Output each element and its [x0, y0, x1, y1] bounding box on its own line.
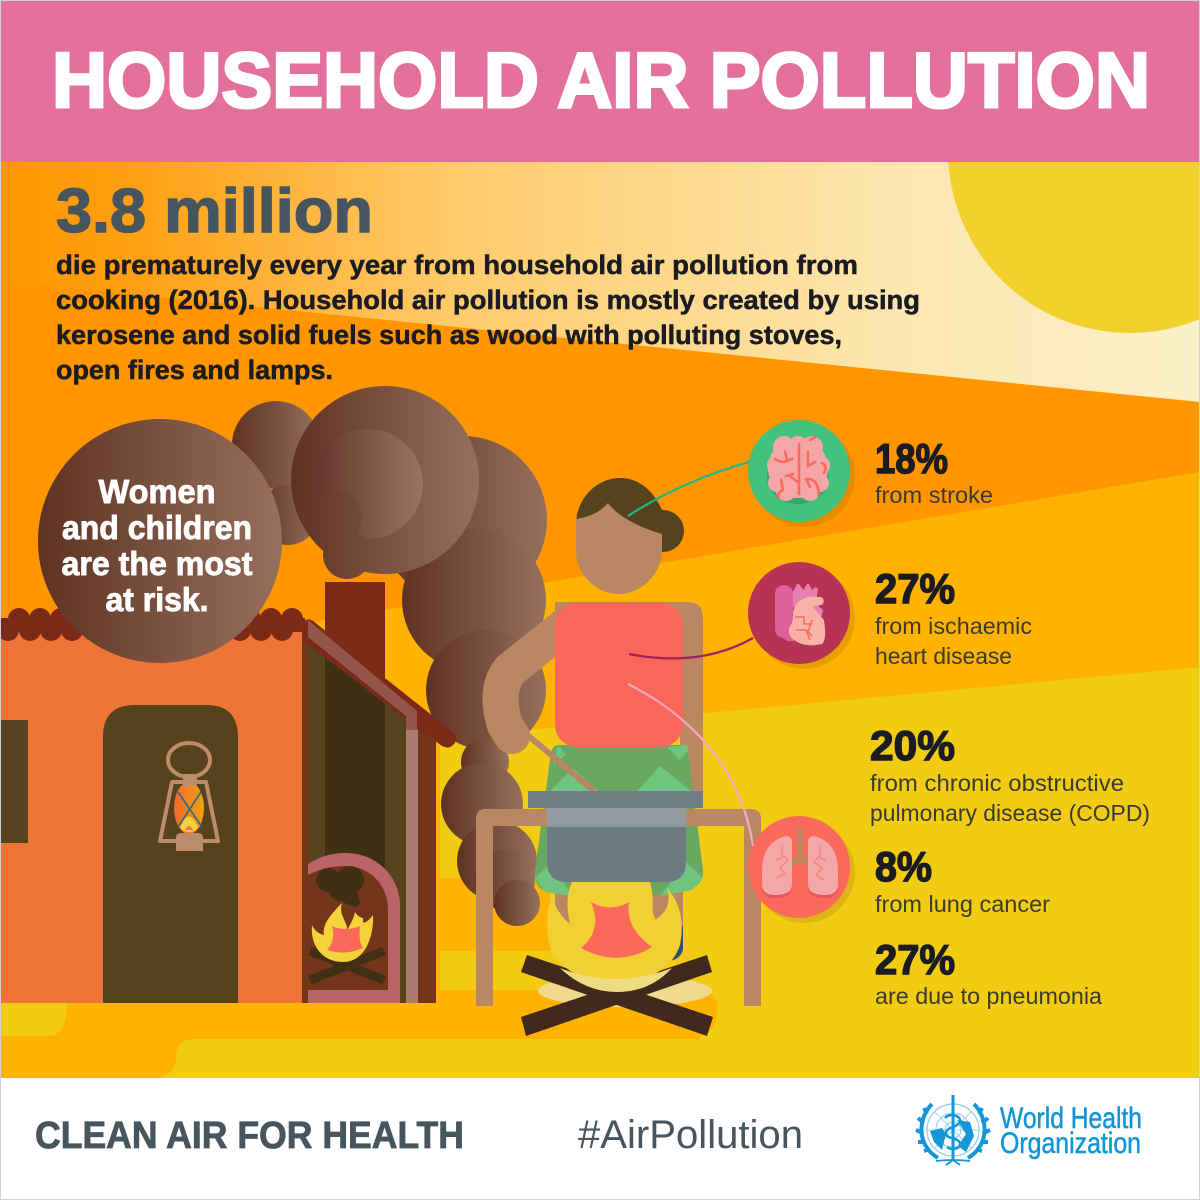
stat: stroke: 18% [875, 435, 948, 482]
campaign slogan: CLEAN AIR FOR HEALTH [35, 1115, 464, 1157]
intro paragraph: kerosene and solid fuels such as wood with polluting stoves, [56, 320, 842, 350]
circle: heart [748, 562, 855, 669]
stat: ischaemic heart disease: heart disease [875, 643, 1012, 669]
intro paragraph [56, 250, 920, 385]
circle: brain [748, 420, 855, 527]
door [103, 705, 238, 1003]
arm and torso [555, 602, 703, 795]
stat: COPD: from chronic obstructive [870, 770, 1124, 796]
hashtag: #AirPollution [578, 1113, 803, 1157]
front wall [0, 626, 303, 1003]
stat: lung cancer: from lung cancer [875, 891, 1050, 917]
circle: lungs [748, 816, 855, 923]
house [0, 582, 456, 1003]
connector: lungs [628, 684, 753, 846]
WHO wordmark: Organization [1000, 1127, 1141, 1160]
table [476, 809, 761, 1006]
stat: pneumonia: are due to pneumonia [875, 983, 1102, 1009]
header band [0, 0, 1200, 162]
icon: lungs [762, 830, 838, 898]
cooking pot [528, 791, 703, 882]
stat: ischaemic heart disease: from ischaemic [875, 613, 1032, 639]
callout: women and children: Women [98, 473, 216, 510]
stat: pneumonia: 27% [875, 936, 955, 983]
connector: heart [629, 638, 753, 658]
stat: stroke [875, 435, 993, 508]
connector: brain [628, 462, 749, 516]
callout: women and children: at risk. [106, 581, 208, 618]
background [0, 162, 1200, 1078]
skirt [535, 745, 703, 896]
stat: COPD [870, 722, 1150, 826]
stat: stroke: from stroke [875, 482, 993, 508]
smoke plume [232, 386, 547, 926]
WHO wordmark [1000, 1102, 1142, 1160]
callout: women and children [38, 419, 282, 663]
intro paragraph: cooking (2016). Household air pollution is mostly created by using [56, 285, 920, 315]
icon: lantern [160, 743, 218, 851]
woman cooking over open fire [476, 478, 761, 1036]
stat: COPD: 20% [870, 722, 955, 769]
window [0, 720, 28, 843]
callout: women and children: are the most [62, 545, 253, 582]
stat: lung cancer [875, 843, 1050, 917]
stirring stick [525, 733, 594, 791]
headline statistic: 3.8 million [56, 177, 373, 246]
torso: red top [555, 603, 683, 747]
title: HOUSEHOLD AIR POLLUTION [52, 36, 1150, 124]
roof tiles [0, 608, 305, 641]
house side wall [302, 622, 436, 1003]
icon: heart [775, 584, 825, 645]
intro paragraph: die prematurely every year from household air pollution from [56, 250, 858, 280]
side roof [303, 619, 456, 748]
legs [555, 892, 683, 926]
footer band [0, 1078, 1200, 1200]
intro paragraph: open fires and lamps. [56, 355, 333, 385]
stat: COPD: pulmonary disease (COPD) [870, 800, 1150, 826]
open fire [521, 882, 713, 1036]
callout: women and children: and children [62, 509, 252, 546]
chimney [325, 582, 385, 692]
stat: ischaemic heart disease [875, 565, 1032, 669]
icon: brain [767, 436, 830, 504]
stove niche [308, 853, 400, 1003]
WHO wordmark: World Health [1000, 1102, 1142, 1135]
stat: lung cancer: 8% [875, 843, 932, 890]
icon: WHO emblem [916, 1095, 990, 1165]
stat: pneumonia [875, 936, 1102, 1009]
head and hair [576, 478, 684, 594]
stat: ischaemic heart disease: 27% [875, 565, 955, 612]
